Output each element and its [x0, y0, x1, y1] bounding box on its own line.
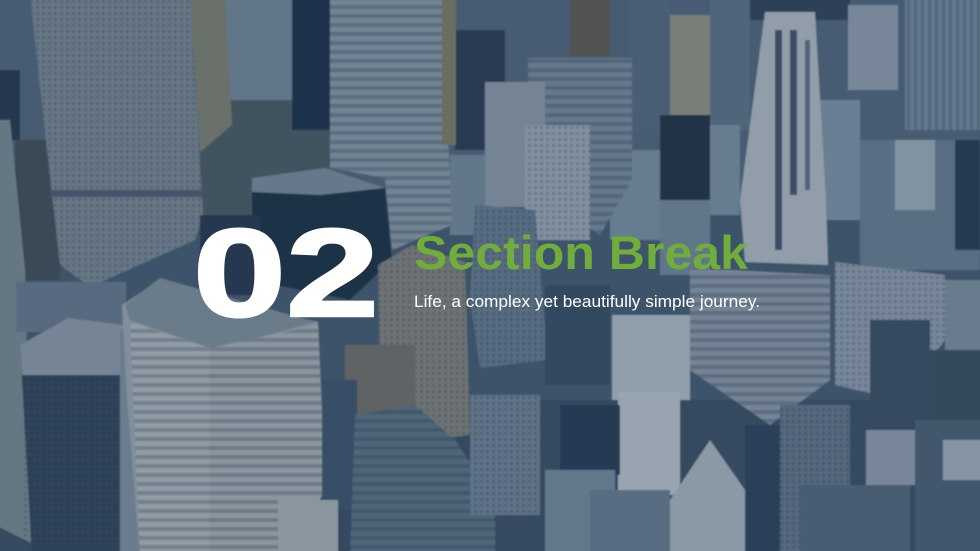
- far buildings: [0, 0, 980, 280]
- left low buildings: [0, 120, 140, 551]
- tan tower: [190, 0, 232, 152]
- mid towers: [485, 0, 710, 240]
- section heading: Section Break: [414, 226, 749, 279]
- subtitle: Life, a complex yet beautifully simple journey.: [414, 293, 760, 311]
- upper right towers: [848, 0, 980, 130]
- central light tower: [330, 0, 456, 250]
- central tan tower and lower blocks: [278, 205, 610, 551]
- right mid buildings: [545, 262, 980, 551]
- dark tower: [292, 0, 330, 130]
- section number: 02: [193, 204, 379, 343]
- right striped tower: [740, 12, 828, 265]
- lower right buildings: [590, 405, 980, 551]
- foreground large building: [122, 278, 325, 551]
- large left tower: [30, 0, 203, 287]
- dark block behind 02: [200, 168, 392, 300]
